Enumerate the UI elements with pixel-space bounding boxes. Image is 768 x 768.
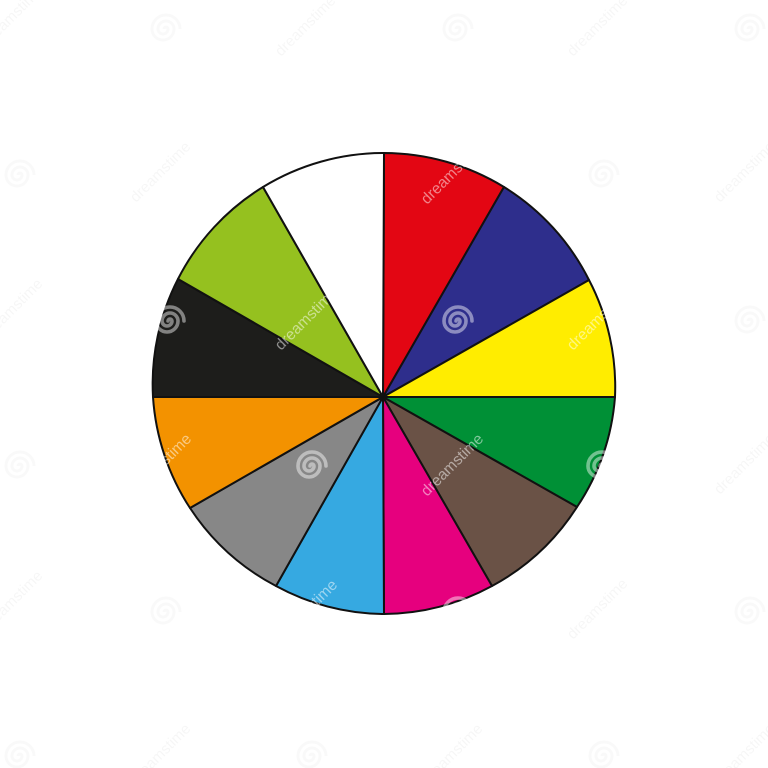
watermark: text on the wheel: dreamstime bbox=[564, 285, 633, 354]
watermark: text on the wheel: dreamstime bbox=[272, 577, 341, 646]
watermark: faint background text: dreamstime bbox=[564, 575, 631, 643]
segment: white bbox=[263, 153, 384, 397]
watermark: text on the wheel: dreamstime bbox=[418, 139, 487, 208]
segment: dark blue bbox=[383, 187, 589, 397]
watermark: faint background text: dreamstime bbox=[127, 138, 194, 206]
segment: green bbox=[383, 397, 615, 507]
segment: lime green bbox=[178, 187, 383, 397]
watermark: spirals on the wheel bbox=[156, 307, 616, 623]
segment: brown bbox=[383, 397, 577, 586]
segment: orange bbox=[153, 397, 383, 508]
segment: grey bbox=[190, 397, 383, 586]
watermark: text on the wheel bbox=[126, 139, 633, 646]
pie chart: twelve colour segments bbox=[153, 153, 615, 614]
segment: yellow bbox=[383, 280, 615, 397]
watermark: text on the wheel: dreamstime bbox=[126, 431, 195, 500]
segment: red bbox=[383, 153, 504, 397]
watermark: text on the wheel: dreamstime bbox=[272, 285, 341, 354]
segment: light blue bbox=[276, 397, 384, 614]
segment: black bbox=[153, 279, 383, 397]
segment: magenta bbox=[383, 397, 492, 614]
watermark: text on the wheel: dreamstime bbox=[418, 431, 487, 500]
